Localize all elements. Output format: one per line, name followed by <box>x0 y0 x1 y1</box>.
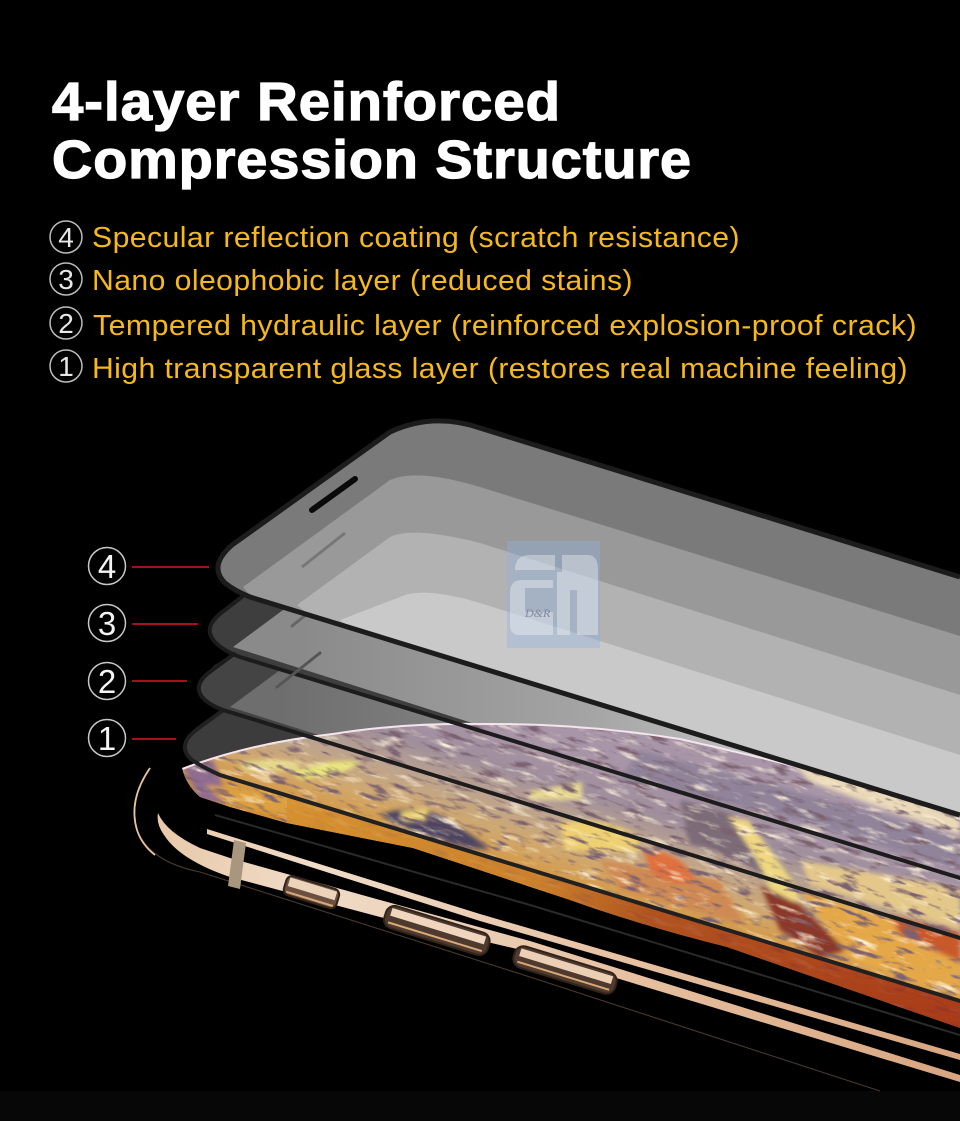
layer 3 fill <box>210 584 960 878</box>
layer 4 outline <box>218 421 960 815</box>
title: Compression Structure <box>52 130 692 190</box>
layer 1 fill <box>186 698 960 1003</box>
callout 1: 1 <box>98 720 116 757</box>
dark lower screen band <box>287 796 960 1030</box>
side button 2 <box>382 904 492 957</box>
gold upper strip <box>207 829 960 1060</box>
title: 4-layer Reinforced <box>52 72 561 132</box>
planet fine marbling <box>184 724 960 1028</box>
list item 2: 2 <box>58 308 74 339</box>
phone body <box>134 768 960 1091</box>
glass layer outlines <box>185 593 960 1001</box>
layer 3 sensor line <box>292 593 333 626</box>
list item 3: 3 <box>58 264 74 295</box>
callout 4: 4 <box>98 548 116 585</box>
planet colour regions <box>182 750 960 1000</box>
callout 2 <box>88 662 187 700</box>
planet wallpaper <box>182 722 960 1028</box>
layer list <box>50 221 917 385</box>
layer 3 outline <box>210 596 960 878</box>
top glass layer 4 <box>200 400 960 830</box>
callout 2: 2 <box>98 663 116 700</box>
callout 3: 3 <box>98 605 116 642</box>
glass layer fills <box>186 584 960 1003</box>
list item 1: High transparent glass layer (restores real machine feeling) <box>92 353 908 385</box>
layer 1 outline <box>185 711 960 1001</box>
layer 4 sensor line <box>302 533 345 567</box>
speaker slot <box>312 479 355 510</box>
side button 1 <box>282 875 341 910</box>
watermark: D&R <box>524 606 551 620</box>
planet bright limb <box>182 723 960 815</box>
phone outer rim <box>134 768 880 1091</box>
title <box>52 72 692 190</box>
callout 1 <box>88 720 176 757</box>
planet base colour <box>170 715 960 1035</box>
list item 2: Tempered hydraulic layer (reinforced explosion-proof crack) <box>93 310 917 342</box>
list item 4: 4 <box>58 222 74 253</box>
layer 4 bands <box>220 423 960 755</box>
layer 2 fill <box>199 640 960 938</box>
gold lower strip <box>158 813 960 1082</box>
layer callouts <box>88 548 209 757</box>
list item 3: Nano oleophobic layer (reduced stains) <box>92 265 633 297</box>
callout 4 <box>88 548 209 585</box>
layer 2 sensor line <box>277 653 320 687</box>
screen bezel line <box>215 815 960 1035</box>
list item 1: 1 <box>58 351 74 382</box>
side button 3 <box>511 944 619 996</box>
callout 3 <box>88 604 198 642</box>
frame ring <box>228 840 246 889</box>
list item 4: Specular reflection coating (scratch resistance) <box>92 222 740 254</box>
watermark <box>507 541 600 648</box>
layer 2 outline <box>199 654 960 938</box>
